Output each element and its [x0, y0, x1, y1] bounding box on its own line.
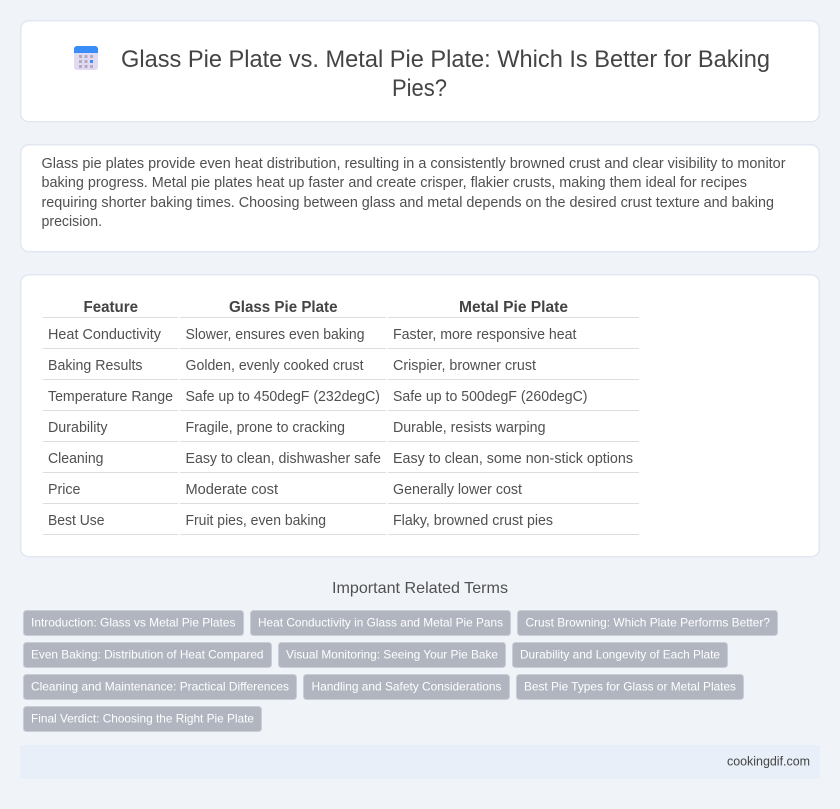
tag: durability — [512, 642, 728, 668]
intro paragraph: Glass pie plates provide even heat distribution, resulting in a consistently browned crust and clear visibility to monitor — [42, 156, 786, 172]
row: durability: Durable, resists warping — [393, 420, 546, 436]
tag: visual monitoring — [278, 642, 506, 668]
tag: best pie types — [516, 674, 744, 700]
row: price: Generally lower cost — [393, 482, 522, 498]
row: durability: Durability — [48, 420, 108, 436]
intro paragraph: precision. — [42, 214, 102, 230]
tag: handling: Handling and Safety Considerations — [312, 680, 502, 694]
title — [121, 46, 770, 102]
table header row: Feature — [84, 299, 138, 316]
tag: even baking — [24, 642, 272, 668]
row: baking results — [48, 358, 536, 374]
row: baking results: Baking Results — [48, 358, 142, 374]
row: cleaning — [48, 451, 633, 467]
heading: important related terms: Important Related Terms — [332, 580, 508, 597]
tag: durability: Durability and Longevity of Each Plate — [520, 648, 720, 662]
row: cleaning: Easy to clean, some non-stick options — [393, 451, 633, 467]
row: price: Price — [48, 482, 80, 498]
tag: visual monitoring: Visual Monitoring: Seeing Your Pie Bake — [286, 648, 498, 662]
tag: final verdict: Final Verdict: Choosing the Right Pie Plate — [31, 712, 254, 726]
row: temperature range: Temperature Range — [48, 389, 173, 405]
tag: introduction: Introduction: Glass vs Metal Pie Plates — [31, 616, 236, 630]
row: cleaning: Cleaning — [48, 451, 104, 467]
row: durability — [48, 420, 546, 436]
tag: heat conductivity: Heat Conductivity in Glass and Metal Pie Pans — [258, 616, 503, 630]
row: temperature range: Safe up to 500degF (260degC) — [393, 389, 588, 405]
row: baking results: Crispier, browner crust — [393, 358, 536, 374]
footer: cookingdif.com — [727, 754, 810, 768]
tag: introduction — [24, 610, 244, 636]
panel: comparison table — [21, 275, 819, 557]
tag: cleaning: Cleaning and Maintenance: Practical Differences — [31, 680, 289, 694]
row: cleaning: Easy to clean, dishwasher safe — [186, 451, 381, 467]
tag: heat conductivity — [250, 610, 510, 636]
icon: calendar — [74, 46, 98, 70]
tag: final verdict — [24, 706, 262, 732]
tag: crust browning — [518, 610, 778, 636]
row: heat conductivity: Slower, ensures even baking — [186, 327, 364, 343]
intro paragraph — [42, 156, 786, 230]
title: Glass Pie Plate vs. Metal Pie Plate: Which Is Better for Baking — [121, 46, 770, 73]
related terms tags — [24, 610, 778, 732]
row: heat conductivity — [48, 327, 576, 343]
row: best use: Best Use — [48, 513, 104, 529]
row: heat conductivity: Heat Conductivity — [48, 327, 162, 343]
intro paragraph: requiring shorter baking times. Choosing between glass and metal depends on the desired crust texture and baking — [42, 195, 774, 211]
panel: introduction text — [21, 145, 819, 252]
row: best use — [48, 513, 553, 529]
table header row: Metal Pie Plate — [459, 299, 568, 316]
row: temperature range: Safe up to 450degF (232degC) — [186, 389, 380, 405]
title: Pies? — [392, 75, 447, 102]
row: temperature range — [48, 389, 588, 405]
footer — [20, 745, 820, 779]
panel: title header — [21, 21, 819, 122]
intro paragraph: baking progress. Metal pie plates heat up faster and create crisper, flakier crusts, making them ideal for recipes — [42, 175, 747, 191]
table header row: Glass Pie Plate — [229, 299, 338, 316]
row: price — [48, 482, 522, 498]
row: price: Moderate cost — [186, 482, 278, 498]
row: heat conductivity: Faster, more responsive heat — [393, 327, 576, 343]
tag: best pie types: Best Pie Types for Glass or Metal Plates — [524, 680, 736, 694]
row: baking results: Golden, evenly cooked crust — [186, 358, 364, 374]
tag: handling — [304, 674, 510, 700]
row: best use: Flaky, browned crust pies — [393, 513, 553, 529]
table header row — [84, 299, 568, 316]
tag: cleaning — [24, 674, 296, 700]
tag: crust browning: Crust Browning: Which Plate Performs Better? — [526, 616, 770, 630]
row: durability: Fragile, prone to cracking — [186, 420, 345, 436]
row: best use: Fruit pies, even baking — [186, 513, 326, 529]
tag: even baking: Even Baking: Distribution of Heat Compared — [31, 648, 264, 662]
